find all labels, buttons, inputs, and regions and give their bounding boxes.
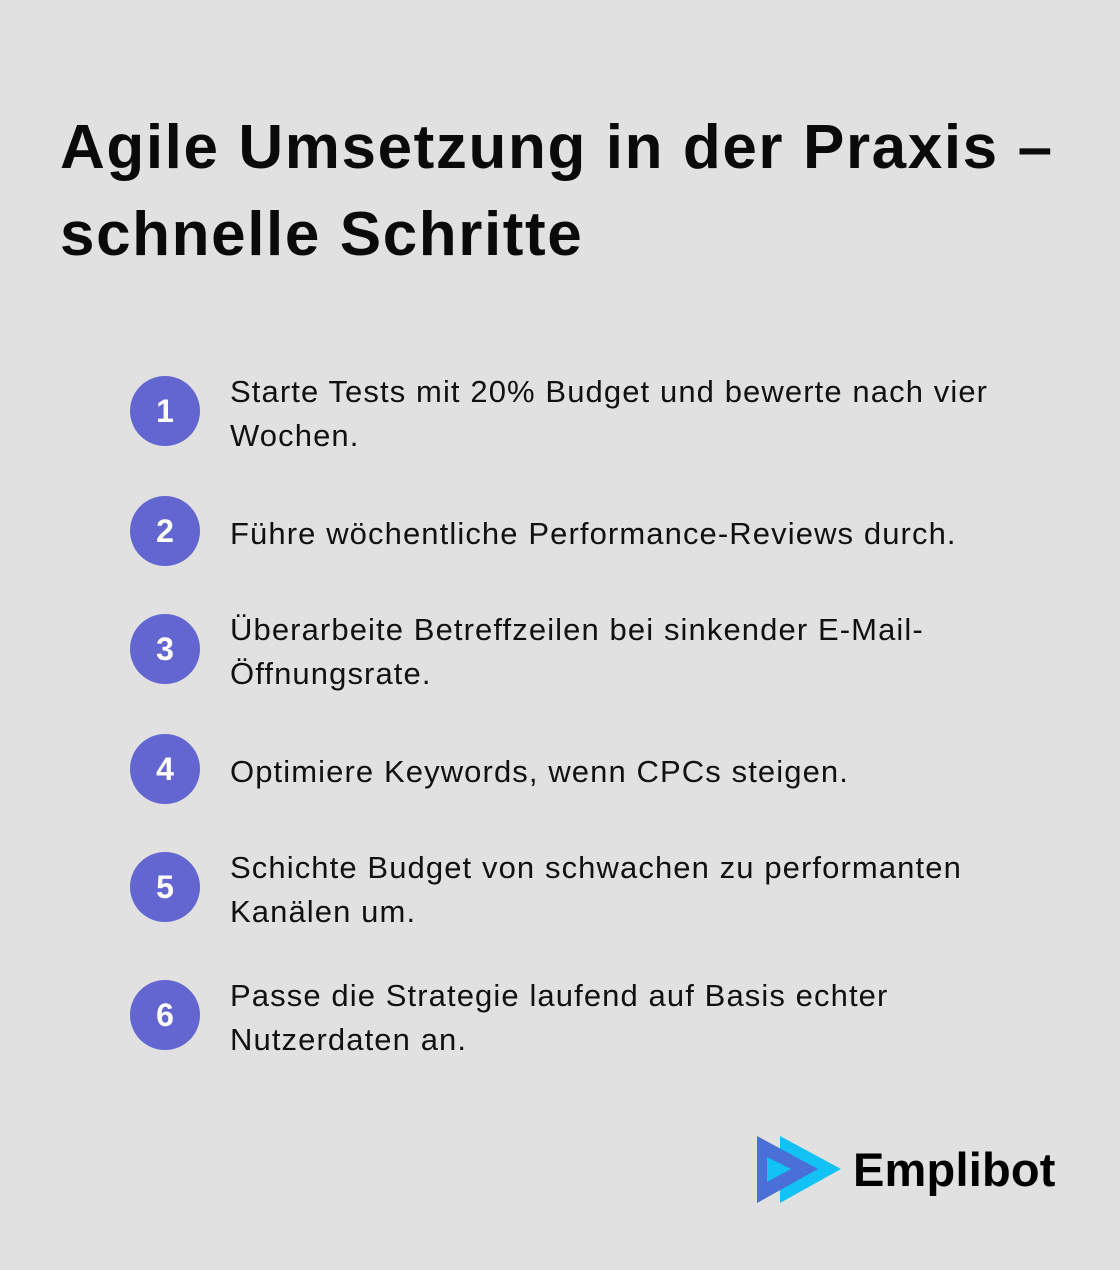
logo	[757, 1136, 1056, 1203]
step 6: Passe die Strategie laufend auf Basis echter	[230, 978, 888, 1013]
step 5: Kanälen um.	[230, 894, 416, 929]
step 1: Wochen.	[230, 418, 359, 453]
step 4: Optimiere Keywords, wenn CPCs steigen.	[230, 754, 849, 789]
step 3	[130, 612, 924, 691]
icon: logo arrows	[757, 1136, 841, 1203]
title: schnelle Schritte	[60, 200, 583, 269]
step 2	[130, 496, 957, 566]
step 4: 4	[156, 751, 174, 787]
step 2: 2	[156, 513, 174, 549]
step 1	[130, 374, 988, 453]
step 5	[130, 850, 962, 929]
step 6: 6	[156, 997, 174, 1033]
title	[60, 113, 1054, 269]
step 1: Starte Tests mit 20% Budget und bewerte nach vier	[230, 374, 988, 409]
step 4	[130, 734, 849, 804]
step 6: Nutzerdaten an.	[230, 1022, 467, 1057]
step 2: Führe wöchentliche Performance-Reviews durch.	[230, 516, 957, 551]
step 5: 5	[156, 869, 174, 905]
step 6	[130, 978, 888, 1057]
step 1: 1	[156, 393, 174, 429]
step 3: Überarbeite Betreffzeilen bei sinkender E-Mail-	[230, 612, 924, 647]
step 3: 3	[156, 631, 174, 667]
step 3: Öffnungsrate.	[230, 656, 432, 691]
step 5: Schichte Budget von schwachen zu performanten	[230, 850, 962, 885]
logo text: Emplibot	[853, 1143, 1056, 1196]
title: Agile Umsetzung in der Praxis –	[60, 113, 1054, 182]
